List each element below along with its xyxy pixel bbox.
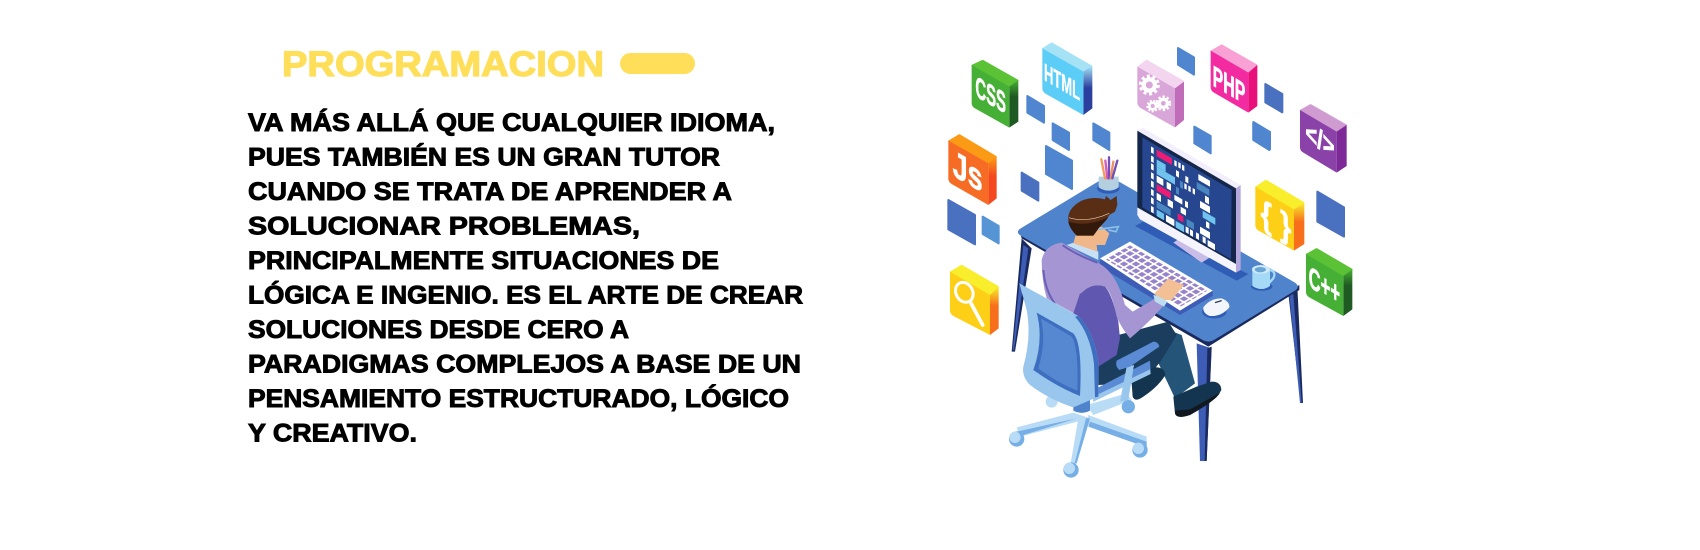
code on screen (1151, 146, 1215, 250)
keyboard (1100, 242, 1213, 315)
coffee mug (1251, 265, 1274, 291)
desk (1012, 177, 1303, 461)
icon: C++ (1306, 249, 1352, 316)
body text: Y CREATIVO. (248, 420, 417, 448)
icon: magnifier (950, 266, 999, 335)
person torso (1042, 243, 1120, 367)
body text: CUANDO SE TRATA DE APRENDER A (248, 178, 732, 206)
body text (248, 108, 803, 448)
body text: PENSAMIENTO ESTRUCTURADO, LÓGICO (248, 383, 789, 413)
icon: braces: { } (1261, 192, 1291, 250)
icon squares on right (1253, 84, 1344, 237)
icon: PHP (1211, 46, 1257, 113)
body text: PUES TAMBIÉN ES UN GRAN TUTOR (248, 142, 720, 172)
person legs (1098, 322, 1221, 417)
icon: HTML: HTML (1044, 58, 1080, 106)
icon: PHP: PHP (1213, 59, 1245, 111)
icon: HTML (1042, 44, 1092, 115)
title: PROGRAMACION (282, 45, 604, 84)
chair back and seat (1019, 283, 1151, 407)
pen cup (1097, 157, 1120, 194)
body text: LÓGICA E INGENIO. ES EL ARTE DE CREAR (248, 280, 803, 310)
icon: C++: C++ (1309, 260, 1340, 311)
icon: braces (1255, 181, 1304, 251)
body text: PARADIGMAS COMPLEJOS A BASE DE UN (248, 350, 801, 378)
body text: PRINCIPALMENTE SITUACIONES DE (248, 247, 719, 275)
icon: CSS (972, 61, 1018, 128)
illustration: programmer at desk with language icons (948, 44, 1352, 478)
icon: code tag (1300, 105, 1347, 173)
chair base (1009, 393, 1148, 478)
armrest (1116, 342, 1159, 370)
icon: CSS: CSS (975, 69, 1006, 120)
icon: gears (1137, 61, 1184, 127)
body text: SOLUCIONAR PROBLEMAS, (248, 212, 640, 240)
person arm (1067, 242, 1184, 338)
icon: JavaScript: Js (953, 141, 983, 201)
title accent pill (620, 53, 695, 74)
monitor (1135, 128, 1248, 281)
person head (1068, 196, 1118, 252)
floating squares (948, 48, 1270, 244)
body text: SOLUCIONES DESDE CERO A (248, 316, 629, 344)
mouse (1202, 298, 1229, 318)
icon: code tag: </> (1305, 117, 1335, 164)
body text: VA MÁS ALLÁ QUE CUALQUIER IDIOMA, (248, 108, 775, 137)
